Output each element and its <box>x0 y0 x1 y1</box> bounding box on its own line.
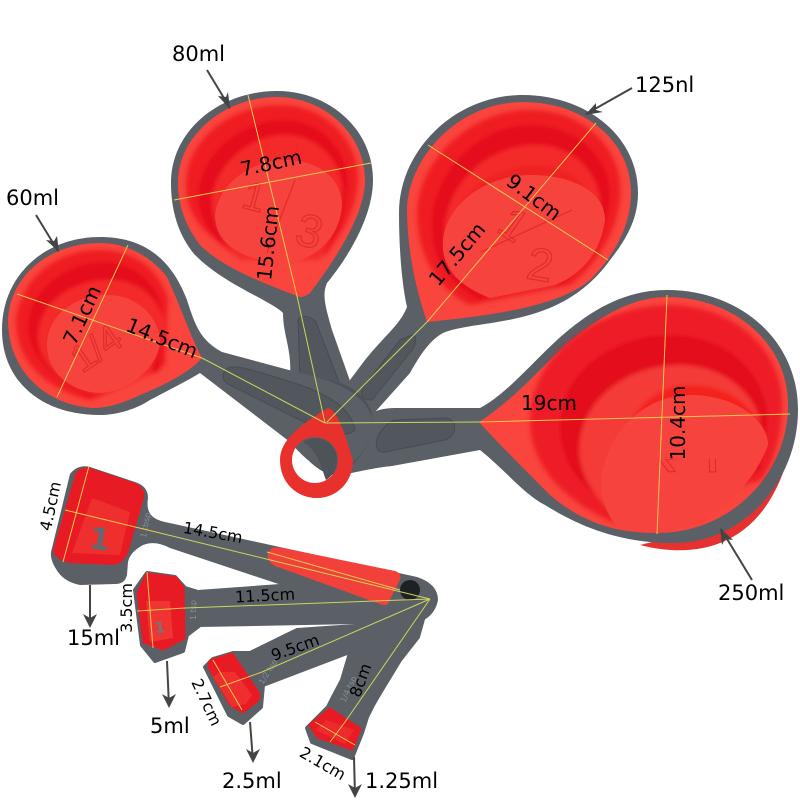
capacity labels: 80ml <box>172 42 225 66</box>
spoon dimension labels: 8cm <box>346 661 375 700</box>
capacity labels: 60ml <box>6 186 59 210</box>
capacity labels: 1.25ml <box>365 769 438 793</box>
spoon: 1.25ml <box>307 612 425 758</box>
spoon dimension labels <box>36 480 375 784</box>
cup dimension labels: 19cm <box>521 391 577 415</box>
handle slot <box>298 316 340 389</box>
cup: 125ml <box>335 95 638 440</box>
embossed numeral: 2 <box>523 237 557 292</box>
measurement lines: cups <box>17 95 790 534</box>
embossed numeral: 3 <box>290 202 329 259</box>
capacity labels: 15ml <box>67 626 120 650</box>
spoon dimension labels: 14.5cm <box>182 518 244 547</box>
hanging hole <box>400 580 420 600</box>
spoon marks: 1 tsp <box>189 600 198 620</box>
cup dimension labels: 17.5cm <box>424 218 490 290</box>
grip insert <box>268 548 400 605</box>
handle slot <box>376 418 455 452</box>
capacity labels: 250ml <box>718 581 784 605</box>
spoon dimension labels: 2.7cm <box>187 676 226 729</box>
arrow: 60ml <box>36 215 59 252</box>
cup dimension labels: 9.1cm <box>502 169 566 225</box>
cup dimension labels: 7.1cm <box>58 282 106 348</box>
stacked handle ends <box>300 379 372 475</box>
cup: 80ml <box>171 91 373 395</box>
hanging ring <box>280 408 353 498</box>
spoon dimension labels: 3.5cm <box>117 583 136 633</box>
arrow: 80ml <box>207 70 230 109</box>
arrow: 1.25ml <box>348 757 362 798</box>
embossed numeral: 1 <box>489 198 537 252</box>
embossed numeral <box>481 198 572 292</box>
embossed numeral: 1 <box>154 618 166 637</box>
arrow: 2.5ml <box>246 722 260 763</box>
embossed numeral: 1/4 <box>63 317 130 381</box>
cup dimension labels: 14.5cm <box>123 313 201 363</box>
embossed numeral: 1 <box>641 432 734 481</box>
measurement lines: spoons <box>63 466 430 745</box>
spoon dimension labels: 4.5cm <box>36 480 65 532</box>
cup dimension labels: 15.6cm <box>252 204 284 282</box>
spoon marks: 1/4 tsp <box>339 675 359 704</box>
spoon dimension labels: 2.1cm <box>296 743 349 784</box>
spoon: 2.5ml <box>205 622 418 723</box>
cup dimension labels: 10.4cm <box>666 385 690 461</box>
spoon: 15ml <box>51 466 438 626</box>
spoon dimension labels: 9.5cm <box>269 630 322 665</box>
spoon dimension labels: 11.5cm <box>235 584 295 607</box>
capacity labels: 2.5ml <box>222 769 282 793</box>
handle slot <box>361 335 416 400</box>
embossed numeral: 1 <box>87 521 112 559</box>
arrow: 250ml <box>720 528 752 580</box>
handle slot <box>223 367 355 434</box>
cup dimension labels: 7.8cm <box>238 145 304 181</box>
capacity labels: 5ml <box>150 714 190 738</box>
cup: 60ml <box>2 237 372 471</box>
embossed numeral <box>238 173 329 259</box>
spoon marks: 1 tbsp <box>139 512 152 538</box>
spoon marks: 1/2 tsp <box>257 658 279 686</box>
cup: 250ml <box>340 290 798 550</box>
capacity labels: 125nl <box>635 73 694 97</box>
arrow: 125ml <box>585 88 632 115</box>
spoon: 5ml <box>135 573 423 661</box>
cup dimension labels <box>58 145 690 461</box>
arrow: 5ml <box>162 661 176 708</box>
arrow: 15ml <box>83 585 97 628</box>
embossed numeral: 1 <box>238 173 271 221</box>
